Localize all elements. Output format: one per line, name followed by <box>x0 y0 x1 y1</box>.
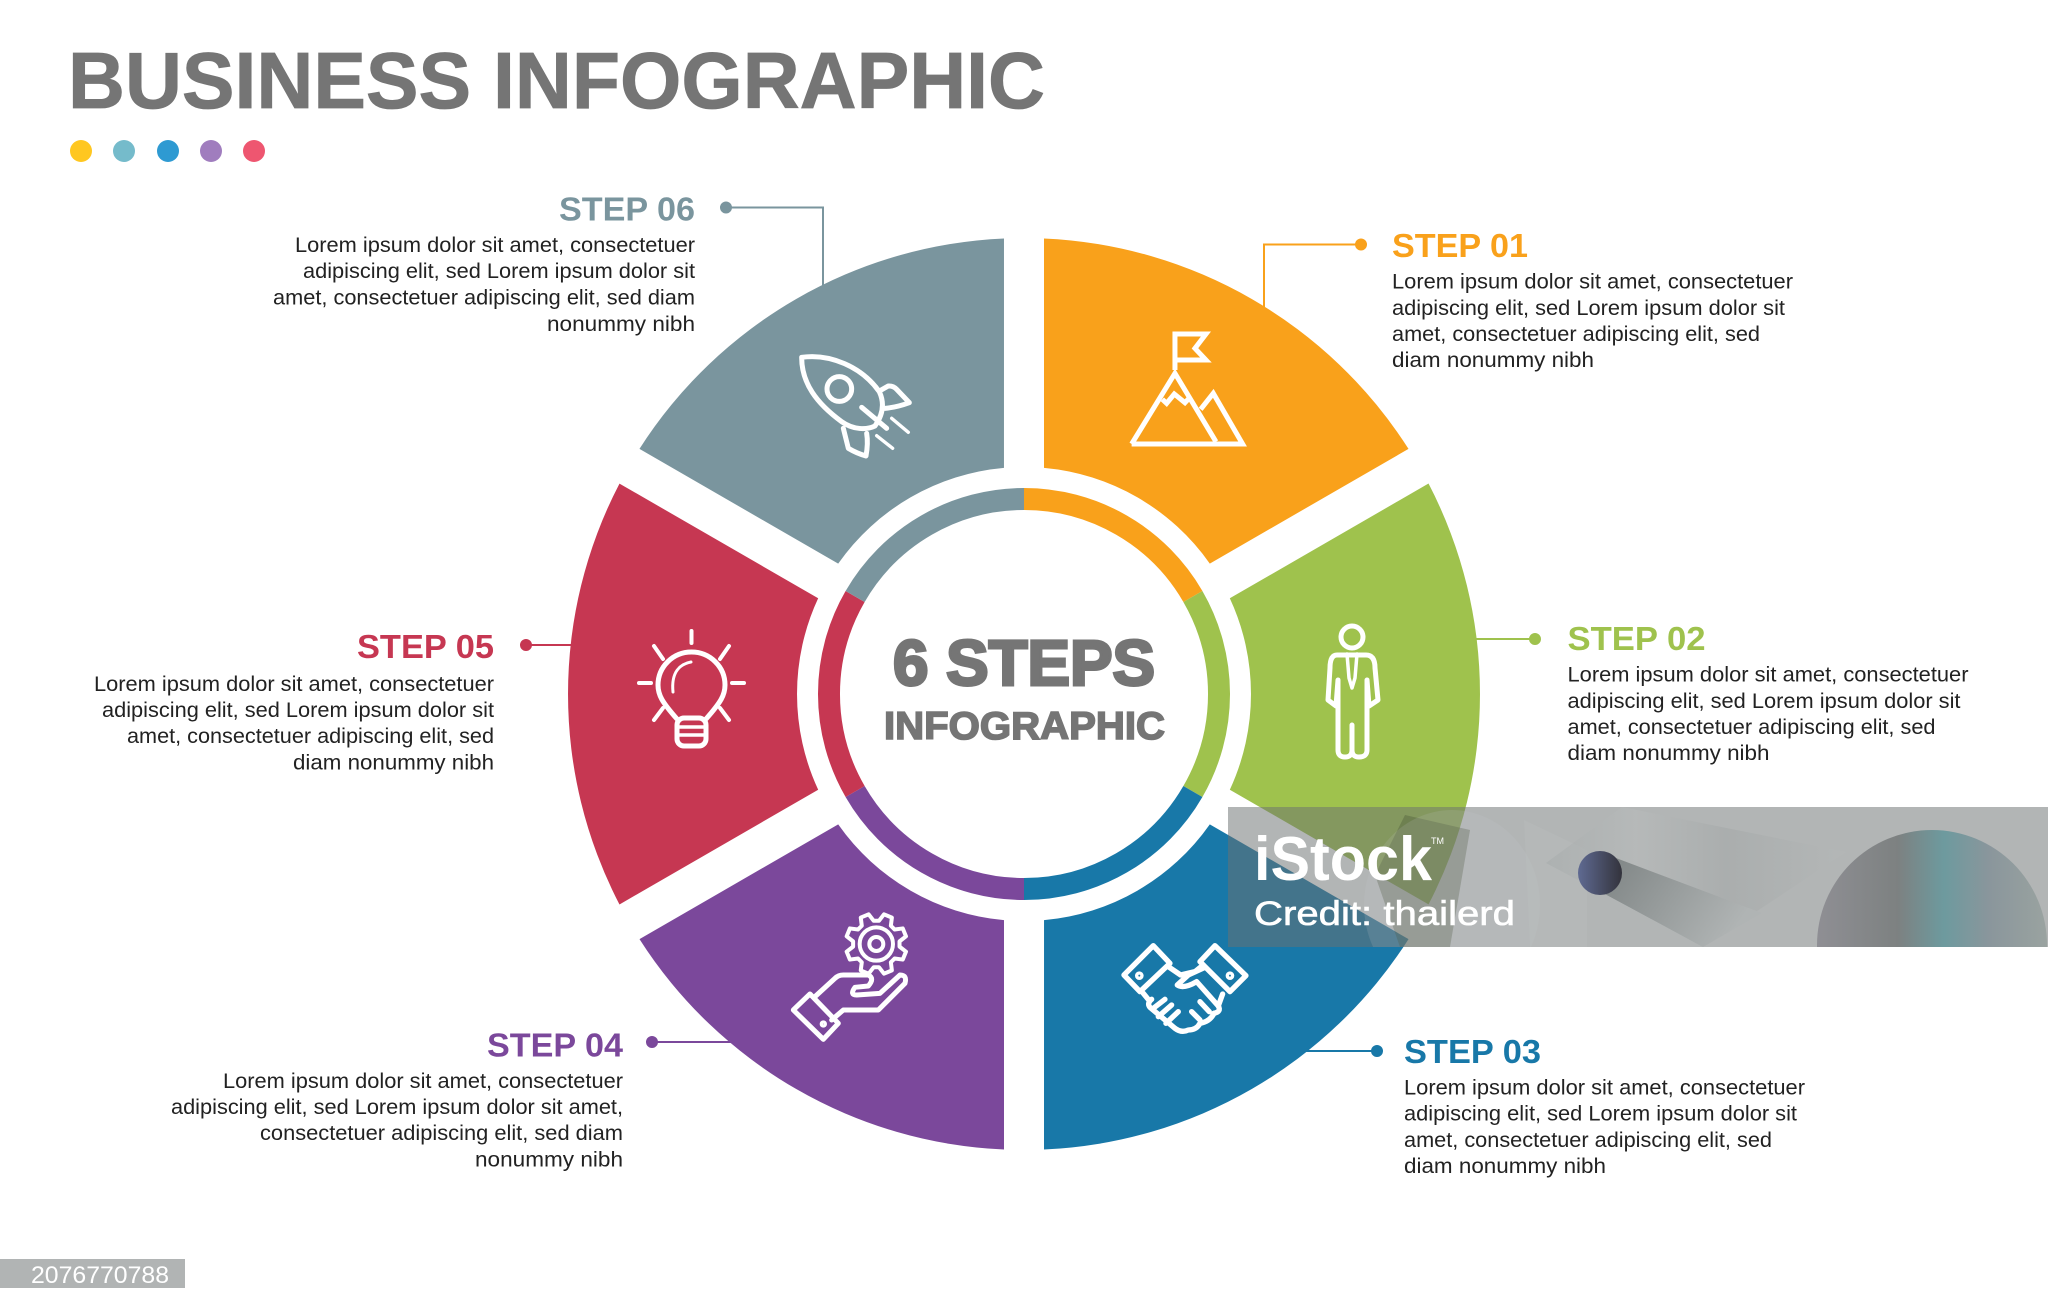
donut chart <box>437 133 1611 1255</box>
panel: step 03 text <box>1404 1033 1805 1178</box>
segment: step 03 <box>945 777 1409 1255</box>
panel: step 06 text: STEP 06 <box>559 190 695 228</box>
panel: step 03 text: adipiscing elit, sed Lorem ipsum dolor sit <box>1404 1102 1797 1126</box>
segment: step 02 <box>1147 484 1611 962</box>
icon: light bulb <box>639 631 744 746</box>
panel: step 05 text: adipiscing elit, sed Lorem ipsum dolor sit <box>102 699 494 722</box>
icon: rocket <box>802 357 909 456</box>
centre heading: INFOGRAPHIC <box>884 705 1165 748</box>
panel: step 03 text: diam nonummy nibh <box>1404 1155 1606 1178</box>
panel: step 01 text: amet, consectetuer adipiscing elit, sed <box>1392 323 1760 346</box>
panel: step 03 text: STEP 03 <box>1404 1033 1541 1070</box>
connector: step 03 <box>1300 1046 1382 1056</box>
segment: step 05 <box>437 426 901 904</box>
panel: step 02 text: Lorem ipsum dolor sit amet, consectetuer <box>1568 664 1969 686</box>
panel: step 05 text: amet, consectetuer adipiscing elit, sed <box>127 725 494 748</box>
panel: step 06 text <box>273 190 695 336</box>
panel: step 04 text: Lorem ipsum dolor sit amet, consectetuer <box>223 1070 623 1093</box>
panel: step 06 text: amet, consectetuer adipiscing elit, sed diam <box>273 286 695 310</box>
title: BUSINESS INFOGRAPHIC <box>68 36 1045 125</box>
connector: step 06 <box>721 202 823 288</box>
segment: step 01 <box>1044 238 1408 564</box>
panel: step 03 text: amet, consectetuer adipiscing elit, sed <box>1404 1129 1772 1152</box>
watermark band <box>1228 807 2048 947</box>
panel: step 02 text <box>1568 620 1969 765</box>
panel: step 06 text: Lorem ipsum dolor sit amet, consectetuer <box>295 234 695 257</box>
icon: handshake <box>1124 946 1246 1031</box>
panel: step 05 text <box>94 628 494 774</box>
panel: step 05 text: STEP 05 <box>357 628 494 665</box>
panel: step 04 text: consectetuer adipiscing elit, sed diam <box>260 1122 623 1145</box>
decorative colour dots <box>70 140 265 162</box>
image id tag <box>0 1259 185 1289</box>
panel: step 04 text: STEP 04 <box>487 1026 624 1064</box>
segment: step 06 <box>639 133 1103 611</box>
panel: step 04 text: nonummy nibh <box>475 1148 623 1172</box>
panel: step 05 text: diam nonummy nibh <box>293 752 494 774</box>
panel: step 02 text: amet, consectetuer adipiscing elit, sed <box>1568 716 1936 739</box>
panel: step 01 text <box>1392 227 1793 372</box>
centre heading: 6 STEPS <box>893 627 1155 699</box>
panel: step 01 text: diam nonummy nibh <box>1392 349 1594 372</box>
icon: hand with gear <box>793 914 906 1039</box>
icon: person <box>1328 626 1378 757</box>
watermark: credit: Credit: thailerd <box>1254 895 1515 933</box>
watermark: iStock logo: TM <box>1431 836 1444 846</box>
icon: mountain flag <box>1132 334 1243 444</box>
panel: step 01 text: adipiscing elit, sed Lorem ipsum dolor sit <box>1392 297 1785 320</box>
panel: step 02 text: diam nonummy nibh <box>1568 742 1770 765</box>
connector: step 04 <box>647 1037 735 1047</box>
connector: step 02 <box>1470 634 1540 644</box>
connector: step 01 <box>1264 240 1366 310</box>
panel: step 02 text: adipiscing elit, sed Lorem ipsum dolor sit <box>1568 690 1961 713</box>
panel: step 05 text: Lorem ipsum dolor sit amet, consectetuer <box>94 673 494 696</box>
panel: step 01 text: STEP 01 <box>1392 227 1528 264</box>
panel: step 06 text: nonummy nibh <box>547 313 695 336</box>
panel: step 01 text: Lorem ipsum dolor sit amet, consectetuer <box>1392 270 1793 294</box>
panel: step 06 text: adipiscing elit, sed Lorem ipsum dolor sit <box>303 260 695 283</box>
connector: step 05 <box>521 640 578 650</box>
segment: step 04 <box>640 824 1004 1150</box>
panel: step 04 text: adipiscing elit, sed Lorem ipsum dolor sit amet, <box>171 1096 623 1119</box>
panel: step 04 text <box>171 1026 624 1172</box>
inner ring <box>771 450 1277 938</box>
centre heading <box>884 627 1165 748</box>
watermark: iStock logo: iStock <box>1254 825 1432 894</box>
panel: step 03 text: Lorem ipsum dolor sit amet, consectetuer <box>1404 1076 1805 1100</box>
image id tag: 2076770788 <box>31 1262 169 1289</box>
panel: step 02 text: STEP 02 <box>1568 620 1706 657</box>
